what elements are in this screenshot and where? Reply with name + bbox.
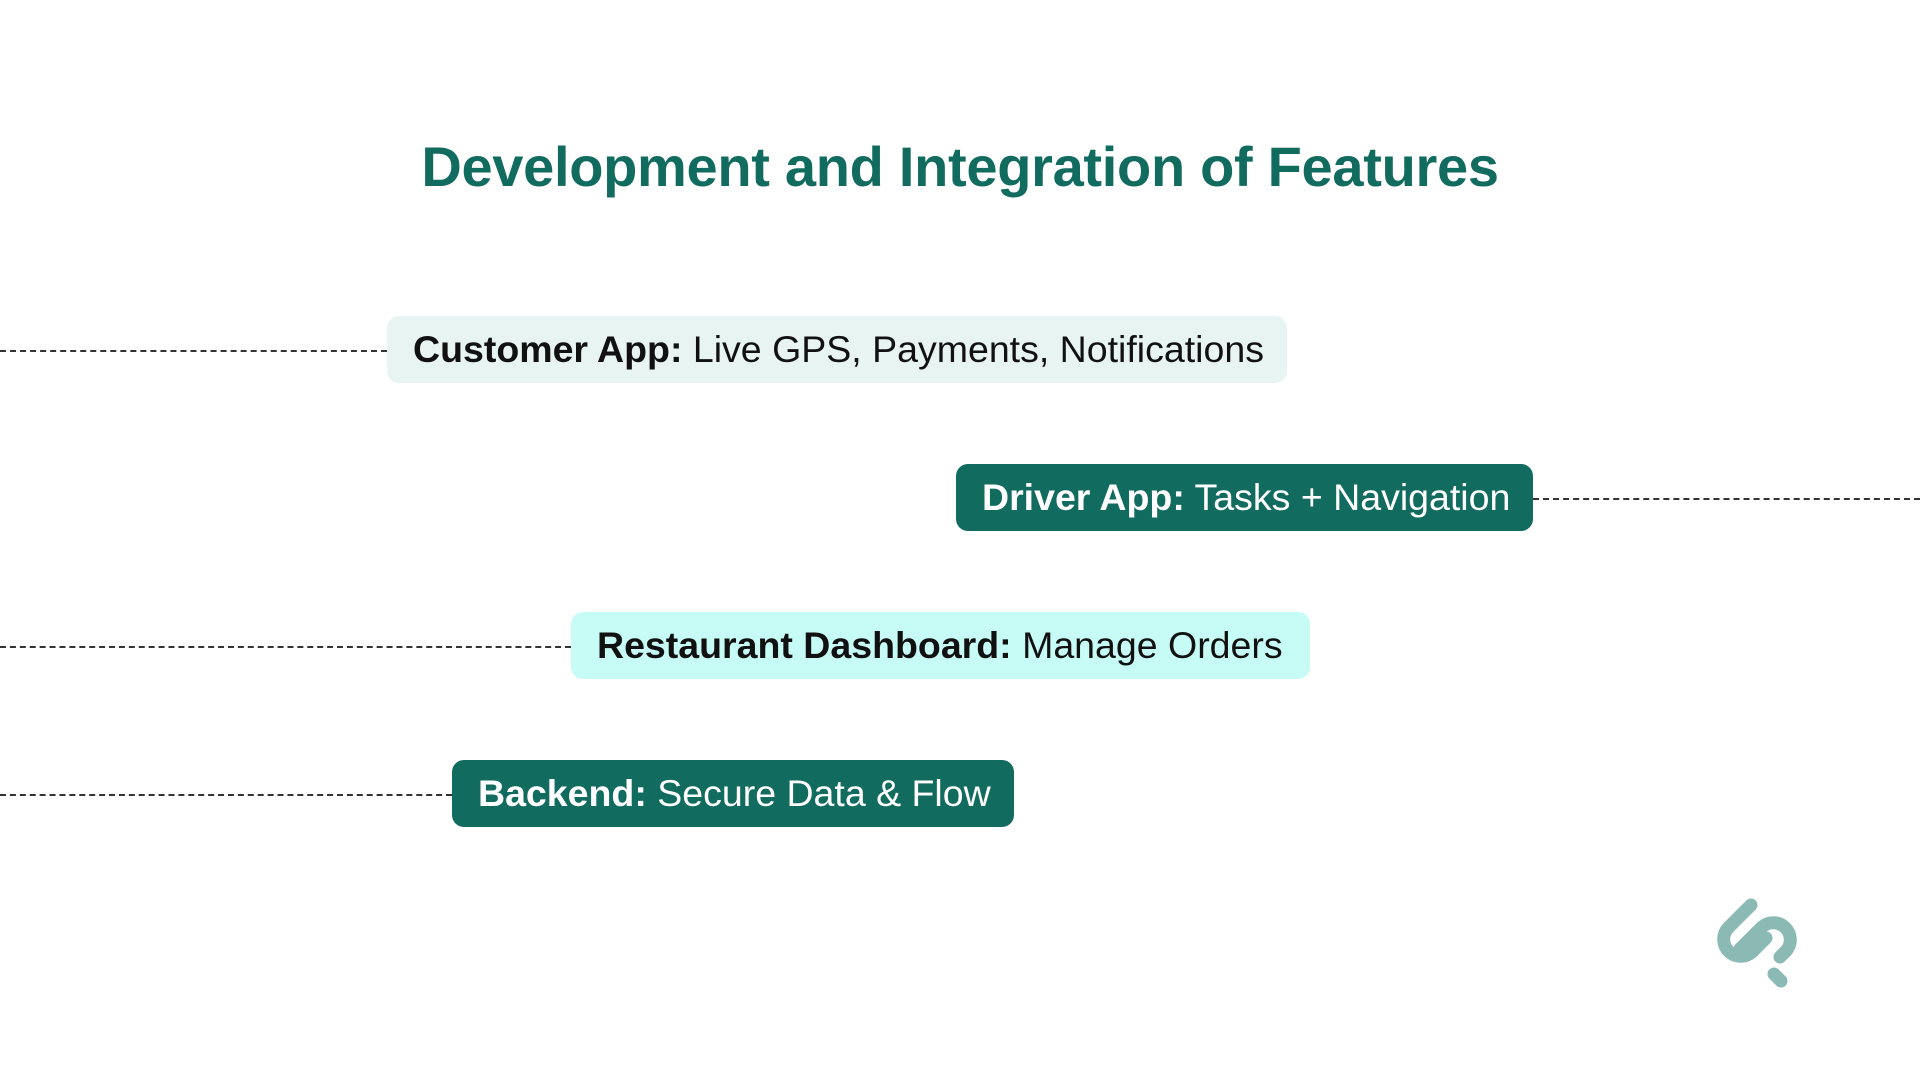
box: driver app bbox=[956, 464, 1533, 531]
box: restaurant dashboard bbox=[571, 612, 1310, 679]
connector: customer app bbox=[0, 350, 387, 352]
box: customer app: Customer App: Live GPS, Payments, Notifications bbox=[413, 328, 1264, 370]
box: driver app: Driver App: Tasks + Navigation bbox=[982, 476, 1510, 518]
connector: restaurant dashboard bbox=[0, 646, 571, 648]
connector: backend bbox=[0, 794, 452, 796]
box: customer app bbox=[387, 316, 1287, 383]
connector: driver app bbox=[1533, 498, 1920, 500]
title: Development and Integration of Features bbox=[421, 135, 1499, 198]
box: restaurant dashboard: Restaurant Dashboard: Manage Orders bbox=[597, 624, 1283, 666]
icon: logo bbox=[1717, 898, 1797, 988]
box: backend: Backend: Secure Data & Flow bbox=[478, 772, 991, 814]
box: backend bbox=[452, 760, 1014, 827]
